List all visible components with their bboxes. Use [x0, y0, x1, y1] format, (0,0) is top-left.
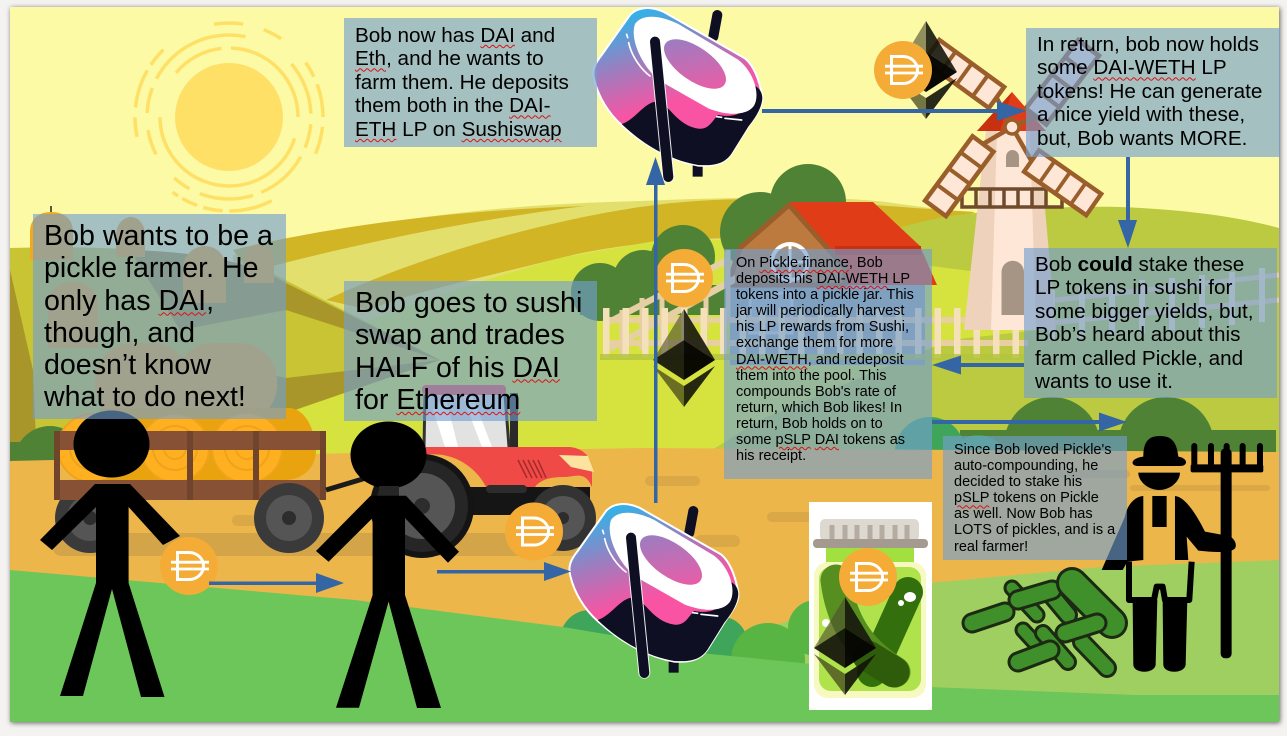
text box: On Pickle.finance: return, Bob holds on to [736, 416, 883, 432]
arrow: Bob to Bob [209, 573, 344, 593]
text box: Bob wants to be a pickle farmer: Bob wants to be a [44, 220, 273, 252]
text box: Bob goes to sushi swap: HALF of his DAI [355, 352, 560, 384]
text box: Since Bob loved auto-compounding: auto-compounding, he [954, 458, 1098, 474]
stick figure: Bob heading to sushi [316, 422, 459, 708]
text box: On Pickle.finance: compounds Bob's rate of [736, 384, 896, 400]
text box: Bob now has DAI and Eth: farm them. He deposits [355, 71, 569, 94]
arrow: sushi to LP tokens [762, 101, 1026, 121]
text box: On Pickle.finance: DAI-WETH, and redeposit [736, 352, 904, 368]
text box: In return bob holds LP tokens: a nice yield with these, [1037, 103, 1245, 126]
text box: On Pickle.finance [724, 249, 932, 479]
text box: On Pickle.finance: return, which Bob likes! In [736, 400, 902, 416]
text box: Bob wants to be a pickle farmer: what to do next! [44, 381, 246, 413]
text box: Bob goes to sushi swap [344, 281, 597, 421]
text box: Bob now has DAI and Eth: them both in the DAI- [355, 94, 550, 117]
text box: On Pickle.finance: exchange them for more [736, 335, 893, 351]
lime wedge [661, 266, 1036, 448]
haystacks [30, 206, 274, 348]
text box: Bob wants to be a pickle farmer [33, 214, 286, 419]
text box: In return bob holds LP tokens: In return, bob now holds [1037, 33, 1259, 56]
text box: Bob wants to be a pickle farmer: though, and [44, 317, 195, 349]
foreground hills and bushes [10, 560, 1279, 722]
pile of pickles [972, 583, 1112, 668]
midground lime field [296, 240, 733, 454]
icon: DAI coin mid [655, 249, 713, 307]
text box: On Pickle.finance: On Pickle.finance, Bob [736, 255, 883, 271]
hay cart [54, 431, 366, 553]
text box: Bob now has DAI and Eth: ETH LP on Sushiswap [355, 118, 562, 141]
text box: In return bob holds LP tokens: tokens! He can generate [1037, 80, 1262, 103]
text box: On Pickle.finance: them into the pool. This [736, 368, 886, 384]
text box: On Pickle.finance: deposits his DAI-WETH LP [736, 271, 910, 287]
text box: Since Bob loved auto-compounding [943, 436, 1127, 560]
right green hill [714, 206, 1279, 452]
text box: Bob could stake: wants to use it. [1035, 370, 1173, 393]
far bushes on road edge [10, 397, 1276, 461]
text box: Since Bob loved auto-compounding: decided to stake his [954, 474, 1082, 490]
arrow: left to pickle finance [932, 356, 1024, 374]
text box: Bob could stake [1024, 248, 1277, 398]
icon: Ethereum near windmill [910, 21, 957, 119]
barn [728, 202, 937, 365]
text box: In return bob holds LP tokens [1026, 28, 1280, 157]
tractor [370, 385, 596, 558]
text box: Bob goes to sushi swap: for Ethereum [355, 384, 520, 416]
icon: DAI coin held by Bob [160, 537, 218, 595]
icon: DAI coin before sushi [505, 502, 563, 560]
text box: Bob now has DAI and Eth [344, 18, 597, 147]
stick figure: Bob with DAI [40, 410, 180, 697]
icon: top sushi roll [593, 8, 762, 177]
bushes behind the barn [571, 164, 846, 321]
windmill [924, 40, 1101, 330]
text box: In return bob holds LP tokens: but, Bob wants MORE. [1037, 127, 1247, 150]
text box: On Pickle.finance: jar will periodically harvest [736, 303, 904, 319]
icon: bottom sushi roll [569, 504, 738, 673]
hay bales [58, 343, 316, 483]
text box: In return bob holds LP tokens: some DAI-WETH LP [1037, 56, 1227, 79]
road shadow and marks [53, 470, 1270, 556]
text box: Since Bob loved auto-compounding: Since Bob loved Pickle's [954, 442, 1112, 458]
text box: Bob now has DAI and Eth: Eth, and he wants to [355, 47, 544, 70]
text box: Since Bob loved auto-compounding: LOTS of pickles, and is a [954, 522, 1115, 538]
arrow: up to top sushi [646, 157, 665, 503]
text box: On Pickle.finance: his receipt. [736, 448, 806, 464]
text box: Bob wants to be a pickle farmer: only has DAI, [44, 285, 214, 317]
icon: Ethereum mid [653, 309, 715, 407]
farmer pictogram [1102, 436, 1263, 672]
arrow: right to farmer [932, 412, 1127, 432]
text box: Bob could stake: farm called Pickle, and [1035, 347, 1243, 370]
text box: On Pickle.finance: his LP rewards from Sushi, [736, 319, 909, 335]
text box: On Pickle.finance: tokens into a pickle jar. This [736, 287, 914, 303]
text box: Bob could stake: Bob could stake these [1035, 253, 1244, 276]
road [10, 448, 1279, 632]
arrow: to sushi [437, 562, 571, 581]
sun [135, 23, 323, 211]
pickle jar image [809, 502, 932, 710]
icon: Ethereum in jar [814, 597, 876, 695]
icon: DAI coin in jar [839, 548, 897, 606]
text box: Bob goes to sushi swap: swap and trades [355, 319, 565, 351]
fence [600, 250, 1279, 360]
arrow: down to could stake [1118, 157, 1137, 248]
distant fields [233, 198, 975, 322]
text box: Bob could stake: Bob’s heard about this [1035, 323, 1240, 346]
left striped field [10, 247, 440, 442]
text box: Bob could stake: some bigger yields, but, [1035, 300, 1253, 323]
text box: Since Bob loved auto-compounding: real farmer! [954, 539, 1028, 555]
text box: Bob wants to be a pickle farmer: doesn’t know [44, 349, 211, 381]
text box: Bob now has DAI and Eth: Bob now has DAI and [355, 24, 555, 47]
text box: Bob could stake: LP tokens in sushi for [1035, 276, 1232, 299]
text box: Bob goes to sushi swap: Bob goes to sushi [355, 287, 582, 319]
sky [10, 7, 1279, 262]
text box: On Pickle.finance: some pSLP DAI tokens as [736, 432, 905, 448]
text box: Bob wants to be a pickle farmer: pickle farmer. He [44, 252, 259, 284]
text box: Since Bob loved auto-compounding: as well. Now Bob has [954, 506, 1093, 522]
icon: DAI coin near windmill [874, 41, 932, 99]
text box: Since Bob loved auto-compounding: pSLP tokens on Pickle [954, 490, 1099, 506]
